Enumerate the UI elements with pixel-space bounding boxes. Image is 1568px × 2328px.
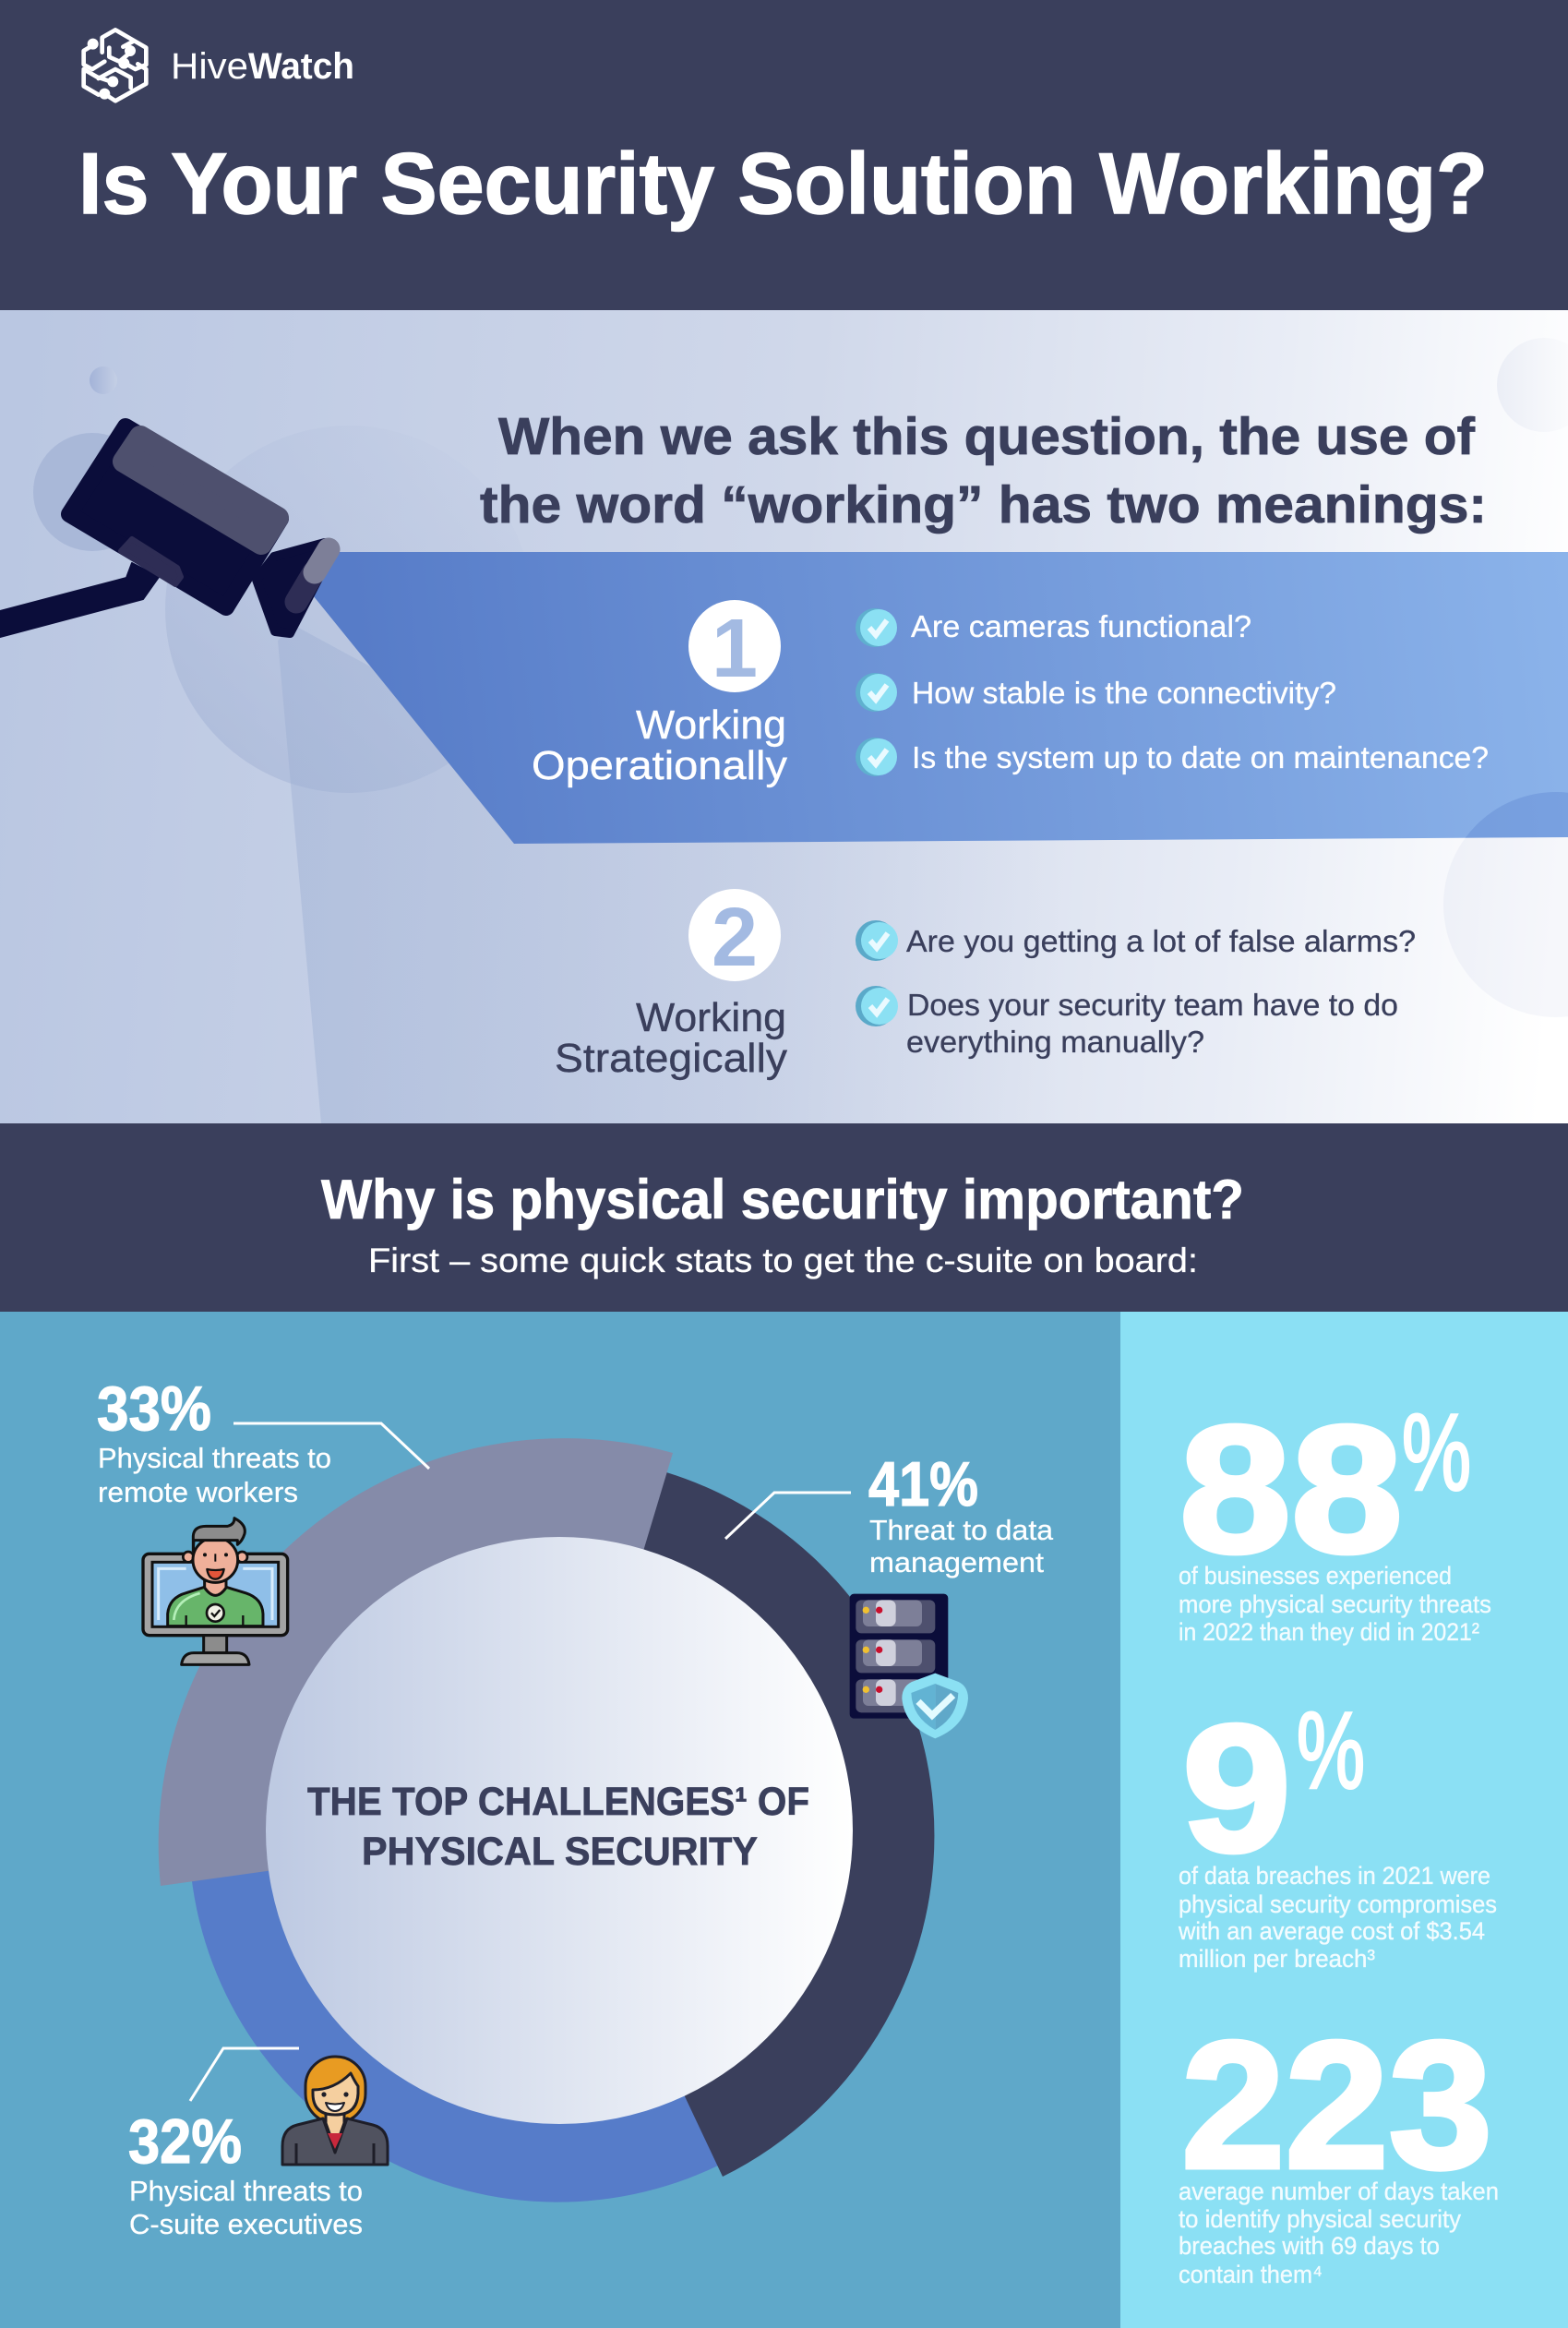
- decorative circle right: [1443, 792, 1568, 1017]
- segment 41 percent: [559, 1472, 934, 2177]
- item 2: working strategically: [555, 889, 1416, 1081]
- label working operationally: [532, 702, 787, 788]
- stat 223 days: contain them⁴: [1179, 2261, 1323, 2288]
- callout: 32 percent: [128, 2048, 363, 2240]
- number badge 1: 1: [712, 603, 758, 695]
- question: connectivity: How stable is the connectivity?: [912, 676, 1336, 710]
- subheading: First – some quick stats to get the c-suite on board:: [368, 1242, 1198, 1279]
- centre title: PHYSICAL SECURITY: [362, 1830, 758, 1874]
- stat 88 percent: %: [1402, 1392, 1471, 1514]
- heading: Why is physical security important?: [321, 1169, 1244, 1230]
- logo wordmark: Watch: [248, 46, 354, 87]
- panel: key statistics: [1120, 1312, 1568, 2328]
- decorative circle top right: [1497, 338, 1568, 432]
- stat 9 percent: 9: [1182, 1687, 1291, 1890]
- subheading: When we ask this question, the use of: [498, 407, 1476, 466]
- stat 223 days: to identify physical security: [1179, 2205, 1461, 2233]
- item 1: working operationally: [532, 600, 1489, 788]
- callout: 41 percent: Threat to data: [869, 1514, 1054, 1546]
- icon: HiveWatch logo: [84, 30, 146, 101]
- icon: executive woman: [282, 2057, 388, 2165]
- stat 88 percent: [1179, 1388, 1491, 1646]
- stat 9 percent: %: [1297, 1690, 1365, 1812]
- callout: 33 percent: remote workers: [98, 1476, 298, 1508]
- stat 9 percent: [1178, 1687, 1497, 1973]
- stat 9 percent: of data breaches in 2021 were: [1179, 1862, 1490, 1890]
- decorative circle behind camera: [33, 433, 151, 551]
- check: connectivity: [856, 673, 897, 712]
- centre circle: [266, 1537, 853, 2124]
- stat 223 days: [1179, 2004, 1499, 2288]
- decorative circle large: [165, 426, 533, 793]
- stat 223 days: 223: [1181, 2004, 1492, 2206]
- question: manual work: everything manually?: [906, 1025, 1204, 1059]
- check: cameras: [856, 608, 897, 647]
- callout: 33 percent: [97, 1374, 429, 1508]
- icon: remote worker on monitor: [143, 1518, 288, 1664]
- band: why is physical security important: [0, 1123, 1568, 1312]
- question: maintenance: Is the system up to date on maintenance?: [912, 740, 1489, 774]
- label working strategically: [555, 995, 787, 1081]
- callout: 33 percent: Physical threats to: [98, 1442, 331, 1474]
- callout: 41 percent: 41%: [868, 1449, 978, 1519]
- callout: 32 percent: Physical threats to: [129, 2175, 363, 2207]
- check: maintenance: [856, 738, 897, 776]
- question: cameras: Are cameras functional?: [911, 609, 1251, 643]
- subheading: the word “working” has two meanings:: [480, 475, 1487, 534]
- callout: 32 percent: C-suite executives: [129, 2208, 363, 2240]
- donut chart: [159, 1438, 934, 2202]
- label working operationally: Operationally: [532, 743, 787, 788]
- stat 88 percent: in 2022 than they did in 2021²: [1179, 1618, 1479, 1646]
- label working strategically: Strategically: [555, 1036, 787, 1081]
- title: Is Your Security Solution Working?: [78, 135, 1488, 232]
- stat 88 percent: 88: [1179, 1388, 1403, 1590]
- callout: 33 percent: 33%: [97, 1374, 211, 1444]
- logo wordmark: Hive: [171, 46, 248, 87]
- header panel: [0, 0, 1568, 310]
- centre title: [307, 1780, 809, 1874]
- label working operationally: Working: [636, 702, 786, 748]
- decorative circle small top left: [90, 366, 117, 394]
- stat 9 percent: with an average cost of $3.54: [1178, 1917, 1485, 1945]
- centre title: THE TOP CHALLENGES¹ OF: [307, 1780, 809, 1824]
- question: manual work: [906, 988, 1398, 1059]
- stat 88 percent: more physical security threats: [1179, 1590, 1491, 1618]
- camera light beam: [278, 625, 1568, 1123]
- callout: 41 percent: [725, 1449, 1054, 1578]
- check: false alarms: [856, 920, 898, 961]
- callout: 41 percent: management: [869, 1546, 1044, 1578]
- logo wordmark: [171, 46, 354, 87]
- icon: security camera: [0, 426, 333, 637]
- question: false alarms: Are you getting a lot of false alarms?: [906, 924, 1416, 958]
- callout: 32 percent: 32%: [128, 2106, 242, 2177]
- number badge 2: [688, 889, 781, 984]
- label working strategically: Working: [636, 995, 786, 1040]
- check: manual work: [856, 986, 898, 1026]
- segment 32 percent: [190, 1830, 729, 2202]
- stat 223 days: breaches with 69 days to: [1179, 2232, 1440, 2260]
- panel: two meanings of working: [0, 310, 1568, 1123]
- subheading: [480, 407, 1487, 534]
- stat 9 percent: physical security compromises: [1179, 1890, 1497, 1918]
- question: manual work: Does your security team have to do: [907, 988, 1398, 1022]
- panel: top challenges chart: [0, 1312, 1120, 2328]
- segment 33 percent: [159, 1438, 673, 1886]
- number badge 2: 2: [712, 892, 758, 984]
- stat 9 percent: million per breach³: [1179, 1945, 1375, 1973]
- icon: server rack with shield: [850, 1594, 968, 1738]
- stat 88 percent: of businesses experienced: [1179, 1562, 1452, 1590]
- blue band: [278, 552, 1568, 844]
- number badge 1: [688, 600, 781, 695]
- stat 223 days: average number of days taken: [1179, 2178, 1499, 2205]
